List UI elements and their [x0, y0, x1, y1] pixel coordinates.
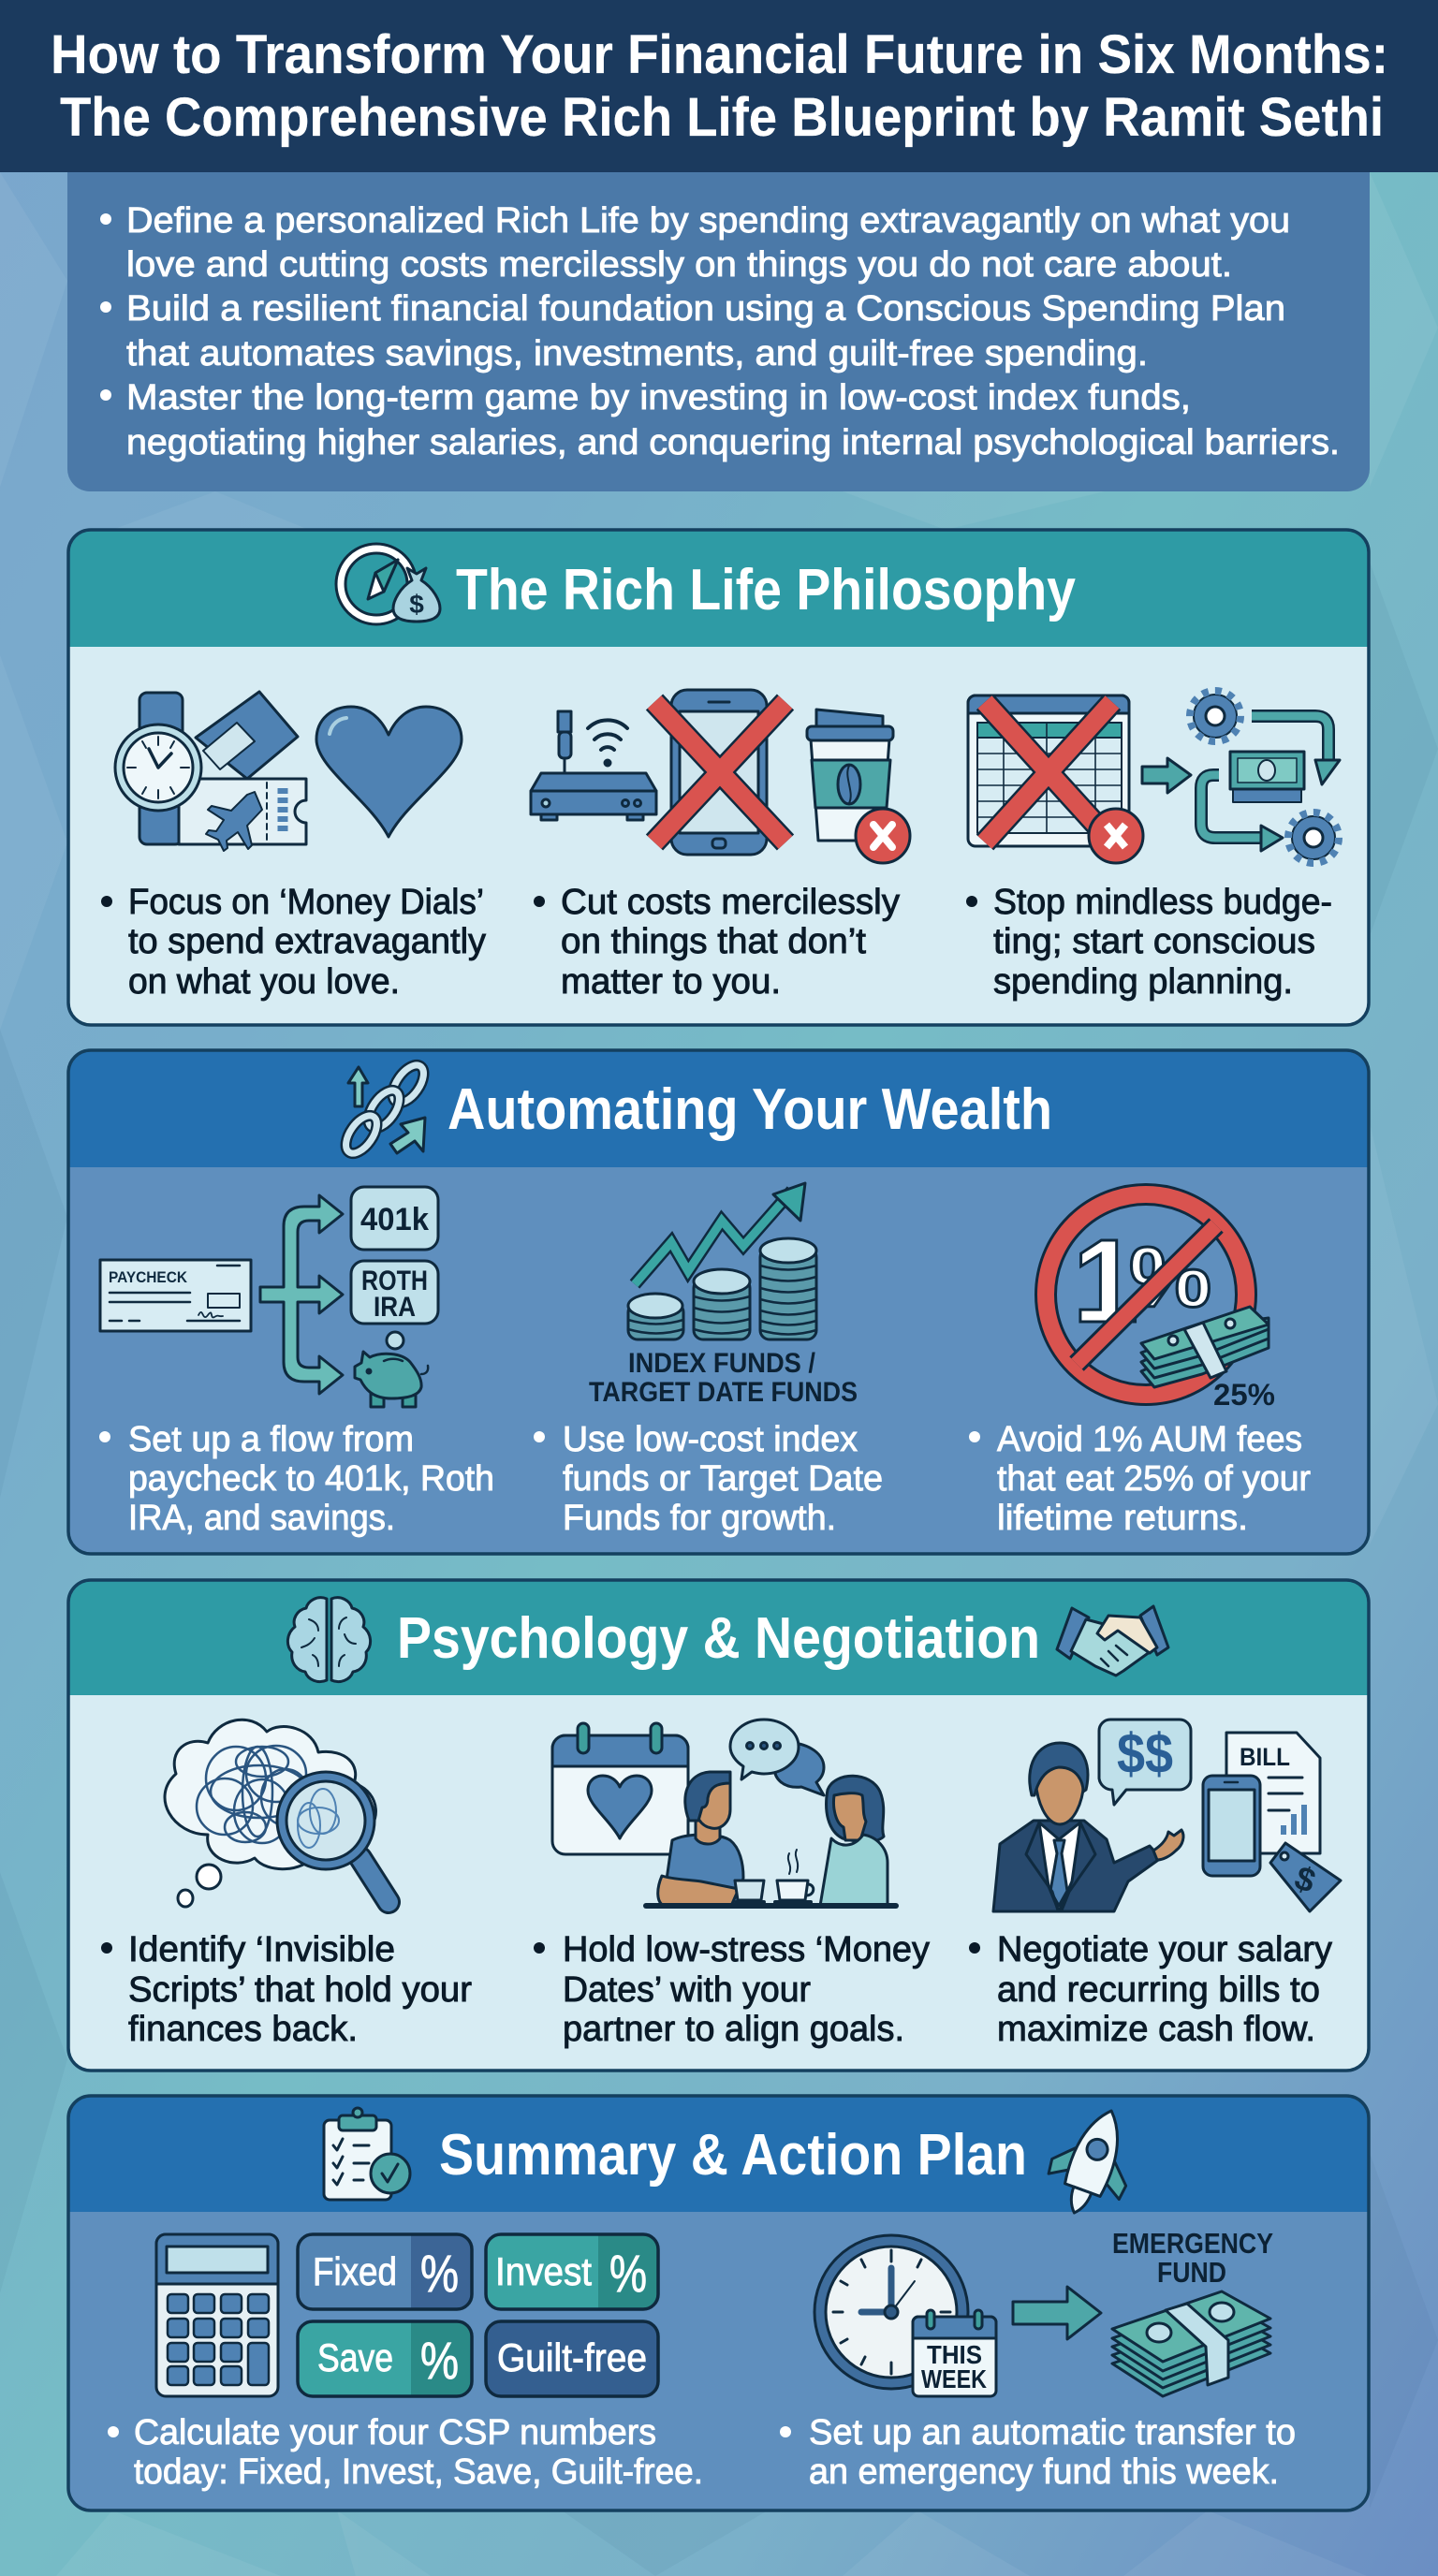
bullet text: negotiate: maximize cash flow.	[997, 2010, 1315, 2049]
icon: price tag: $	[1290, 1858, 1321, 1900]
icon: automated money cycle with gears	[1190, 691, 1340, 863]
icon: magnifying glass	[277, 1772, 389, 1902]
icon: businessman	[993, 1743, 1183, 1911]
bullet text: automatic transfer: Set up an automatic transfer to	[809, 2413, 1296, 2452]
icon: heart	[316, 707, 462, 837]
box: Roth IRA	[351, 1261, 438, 1324]
icon: router with wifi	[531, 711, 656, 820]
icon: clock	[814, 2235, 968, 2389]
bullet text: Stop budgeting: Stop mindless budge-	[993, 883, 1332, 922]
bullet text: invisible scripts: Identify ‘Invisible	[128, 1930, 395, 1969]
icon: speech bubble with dollars	[1099, 1720, 1191, 1805]
bullet text: fees: that eat 25% of your	[997, 1459, 1311, 1499]
intro panel	[67, 140, 1370, 491]
icon: paycheck: PAYCHECK	[109, 1268, 188, 1286]
icon: paycheck	[100, 1260, 251, 1331]
box: Guilt-free	[486, 2321, 658, 2396]
intro bullets	[100, 213, 111, 401]
icon: rocket	[1037, 2098, 1149, 2226]
bullet text: automatic transfer: an emergency fund this week.	[809, 2452, 1279, 2492]
icon: compass and money bag: $	[409, 590, 424, 619]
box: Invest	[486, 2234, 658, 2309]
bullet text: negotiate: and recurring bills to	[997, 1970, 1320, 2010]
bullet text: Money Dials	[101, 883, 486, 1002]
icon: clipboard checklist	[324, 2108, 410, 2200]
bullet text: index funds: Use low-cost index	[563, 1420, 858, 1459]
box: 401k: 401k	[360, 1202, 429, 1237]
bullet text: money dates	[534, 1930, 930, 2049]
label: emergency fund: FUND	[1157, 2256, 1226, 2289]
icon: price tag	[1270, 1843, 1341, 1911]
intro text: negotiating higher salaries, and conquering internal psychological barriers.	[126, 423, 1340, 462]
box: Roth IRA: ROTH	[361, 1266, 428, 1296]
box: Save	[298, 2321, 472, 2396]
bullet text: negotiate	[969, 1930, 1332, 2049]
icon: this week calendar: THIS	[927, 2340, 982, 2369]
icon: 1% prohibited: 1	[1073, 1215, 1138, 1347]
bullet text: Stop budgeting: ting; start conscious	[993, 922, 1315, 961]
box: Roth IRA: IRA	[374, 1292, 416, 1323]
bullet text: money dates: partner to align goals.	[563, 2010, 904, 2049]
icon: speech bubbles	[730, 1720, 824, 1795]
icon: rising arrow	[635, 1183, 805, 1284]
intro text: that automates savings, investments, and guilt-free spending.	[126, 334, 1148, 373]
title banner	[0, 0, 1438, 172]
box: Guilt-free: Guilt-free	[497, 2335, 647, 2379]
bullet text: money dates: Dates’ with your	[563, 1970, 811, 2010]
bullet text: CSP numbers	[108, 2413, 703, 2492]
label: emergency fund: EMERGENCY	[1112, 2227, 1273, 2260]
bullet text: CSP numbers: Calculate your four CSP numbers	[134, 2413, 656, 2452]
bullet text: Cut costs: on things that don’t	[561, 922, 866, 961]
title banner: How to Transform Your Financial Future in Six Months:	[51, 24, 1388, 85]
icon: tangled thought cloud	[165, 1720, 375, 1907]
icon: man at table	[658, 1772, 743, 1906]
icon: this week calendar	[913, 2310, 996, 2396]
heading: Summary & Action Plan: Summary & Action Plan	[439, 2123, 1027, 2188]
bullet text: Money Dials: on what you love.	[128, 962, 400, 1002]
box: Save: %	[420, 2331, 459, 2390]
icon: brain	[287, 1598, 371, 1682]
icon: 1% prohibited: %	[1129, 1230, 1211, 1325]
icon: bill document	[1226, 1733, 1320, 1853]
icon: crossed-out phone	[654, 690, 785, 855]
box: Fixed	[298, 2234, 472, 2309]
icon: piggy bank	[355, 1332, 428, 1407]
icon: handshake	[1057, 1606, 1168, 1676]
intro text: Define a personalized Rich Life by spending extravagantly on what you	[126, 201, 1290, 241]
panel: Summary & Action Plan	[68, 2096, 1369, 2510]
intro text: Master the long-term game by investing in low-cost index funds,	[126, 378, 1191, 417]
box: Fixed: %	[420, 2244, 459, 2303]
bullet text: index funds: funds or Target Date	[563, 1459, 883, 1499]
box: Fixed: Fixed	[313, 2249, 397, 2293]
box: Save: Save	[317, 2335, 393, 2379]
bullet text: invisible scripts: finances back.	[128, 2010, 358, 2049]
arrow: spreadsheet to plan	[1142, 758, 1191, 793]
bullet text: Stop budgeting: spending planning.	[993, 962, 1293, 1002]
title banner: The Comprehensive Rich Life Blueprint by Ramit Sethi	[60, 87, 1384, 148]
bullet text: flow	[99, 1420, 494, 1538]
bullet text: invisible scripts: Scripts’ that hold your	[128, 1970, 472, 2010]
bullet text: invisible scripts	[101, 1930, 472, 2049]
panel: Automating Your Wealth	[68, 1050, 1369, 1554]
box: Invest: %	[609, 2244, 647, 2303]
bullet text: negotiate: Negotiate your salary	[997, 1930, 1332, 1969]
bullet text: money dates: Hold low-stress ‘Money	[563, 1930, 930, 1969]
arrow: to emergency fund	[1013, 2287, 1101, 2339]
bullet text: index funds	[534, 1420, 883, 1538]
icon: watch and tickets	[115, 692, 306, 851]
bullet text: flow: paycheck to 401k, Roth	[128, 1459, 494, 1499]
bullet text: index funds: Funds for growth.	[563, 1499, 836, 1538]
icon: coffee cup with red x	[807, 710, 910, 863]
label: index funds: TARGET DATE FUNDS	[589, 1377, 858, 1408]
icon: speech bubble with dollars: $$	[1117, 1722, 1173, 1785]
bullet text: CSP numbers: today: Fixed, Invest, Save, Guilt-free.	[134, 2452, 703, 2492]
bullet text: Stop budgeting	[966, 883, 1332, 1002]
bullet text: Money Dials: to spend extravagantly	[128, 922, 486, 961]
icon: phone	[1203, 1776, 1260, 1876]
bullet text: automatic transfer	[780, 2413, 1296, 2492]
icon: coin stacks	[628, 1238, 816, 1339]
label: index funds	[589, 1348, 858, 1408]
bullet text: fees: lifetime returns.	[997, 1499, 1248, 1538]
label: index funds: INDEX FUNDS /	[628, 1348, 816, 1379]
bullet text: Cut costs: Cut costs mercilessly	[561, 883, 900, 922]
bullet text: Money Dials: Focus on ‘Money Dials’	[128, 883, 484, 922]
heading: The Rich Life Philosophy: The Rich Life Philosophy	[456, 558, 1076, 622]
icon: woman at table	[820, 1776, 888, 1906]
arrows: paycheck flow	[260, 1195, 343, 1394]
icon: calendar with heart	[552, 1723, 688, 1854]
bullet text: Cut costs	[534, 883, 900, 1002]
bullet text: flow: Set up a flow from	[128, 1420, 414, 1459]
intro text: Build a resilient financial foundation using a Conscious Spending Plan	[126, 289, 1285, 329]
bullet text: Cut costs: matter to you.	[561, 962, 781, 1002]
icon: money stack	[1141, 1307, 1269, 1387]
label: 25%: 25%	[1213, 1378, 1275, 1412]
label: emergency fund	[1112, 2227, 1273, 2289]
bullet text: flow: IRA, and savings.	[128, 1499, 395, 1538]
heading: Psychology & Negotiation: Psychology & Negotiation	[397, 1606, 1040, 1671]
intro text	[126, 201, 1340, 462]
icon: chain with arrows	[340, 1060, 430, 1159]
icon: compass and money bag	[341, 549, 440, 622]
icon: coffee cups and table	[646, 1850, 896, 1906]
box: 401k	[351, 1187, 438, 1250]
icon: bill document: BILL	[1240, 1743, 1290, 1771]
bullet text: fees	[969, 1420, 1311, 1538]
bullet text: fees: Avoid 1% AUM fees	[997, 1420, 1302, 1459]
icon: this week calendar: WEEK	[921, 2364, 987, 2393]
icon: crossed-out spreadsheet	[968, 695, 1143, 863]
heading: Automating Your Wealth: Automating Your Wealth	[448, 1077, 1052, 1142]
panel: Psychology & Negotiation	[68, 1580, 1369, 2071]
icon: calculator	[156, 2234, 278, 2396]
box: Invest: Invest	[495, 2249, 592, 2293]
intro text: love and cutting costs mercilessly on things you do not care about.	[126, 245, 1232, 285]
icon: emergency fund cash stack	[1112, 2291, 1270, 2396]
panel: The Rich Life Philosophy	[68, 530, 1369, 1025]
icon: 1% prohibited	[1046, 1194, 1246, 1395]
